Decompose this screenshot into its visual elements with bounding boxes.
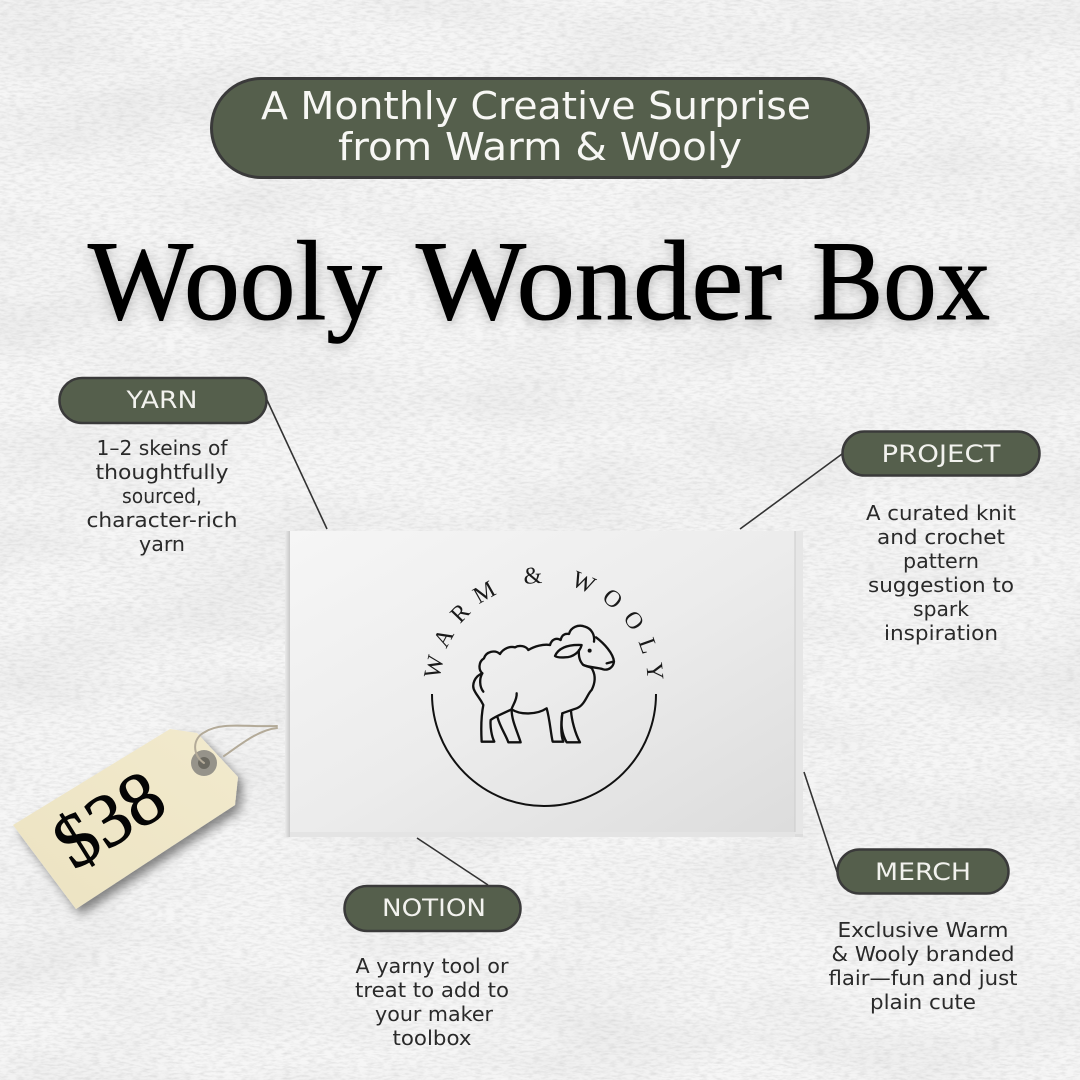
tag price: $38 — [38, 754, 180, 885]
merch description: flair—fun and just — [828, 966, 1018, 990]
notion description: your maker — [375, 1002, 494, 1026]
notion description: treat to add to — [355, 978, 509, 1002]
yarn description: thoughtfully — [96, 460, 229, 484]
tag body — [13, 729, 238, 909]
subtitle pill: A Monthly Creative Surprise — [261, 84, 811, 128]
project description: suggestion to — [868, 573, 1014, 597]
yarn description: sourced, — [122, 484, 202, 508]
brand logo — [424, 568, 664, 807]
logo text on arc: WARM & WOOLY — [424, 568, 664, 679]
project description: inspiration — [884, 621, 998, 645]
title — [88, 219, 990, 344]
title: Wooly — [88, 219, 382, 344]
panel: notion — [344, 886, 520, 1050]
project description: spark — [913, 597, 969, 621]
notion description: toolbox — [392, 1026, 472, 1050]
price tag — [13, 726, 277, 909]
yarn description — [86, 436, 238, 556]
yarn label — [60, 378, 266, 423]
project description: and crochet — [877, 525, 1005, 549]
connector lines — [267, 400, 842, 885]
merch label — [838, 850, 1008, 894]
notion description — [355, 954, 509, 1050]
tag string — [195, 726, 277, 763]
subtitle pill: from Warm & Wooly — [338, 125, 742, 169]
merch label: MERCH — [875, 858, 971, 886]
notion description: A yarny tool or — [356, 954, 509, 978]
title: Wonder — [416, 219, 782, 344]
notion label — [344, 886, 520, 931]
yarn description: character-rich — [86, 508, 238, 532]
merch description: Exclusive Warm — [838, 918, 1008, 942]
yarn label: YARN — [125, 386, 198, 414]
project label: PROJECT — [882, 440, 1001, 468]
white box — [285, 531, 803, 837]
logo arc — [432, 694, 656, 806]
project description: pattern — [903, 549, 979, 573]
merch description — [828, 918, 1018, 1014]
panel: merch — [828, 850, 1018, 1014]
project description — [866, 501, 1016, 645]
yarn description: yarn — [139, 532, 185, 556]
icon: sheep — [473, 626, 614, 742]
yarn description: 1–2 skeins of — [96, 436, 228, 460]
project description: A curated knit — [866, 501, 1016, 525]
notion label: NOTION — [382, 894, 486, 922]
subtitle pill — [212, 78, 868, 178]
tag eyelet — [191, 750, 217, 776]
panel: project — [842, 432, 1040, 645]
merch description: plain cute — [870, 990, 976, 1014]
merch description: & Wooly branded — [832, 942, 1014, 966]
project label — [842, 432, 1040, 476]
panel: yarn — [60, 378, 266, 556]
title: Box — [812, 219, 990, 344]
